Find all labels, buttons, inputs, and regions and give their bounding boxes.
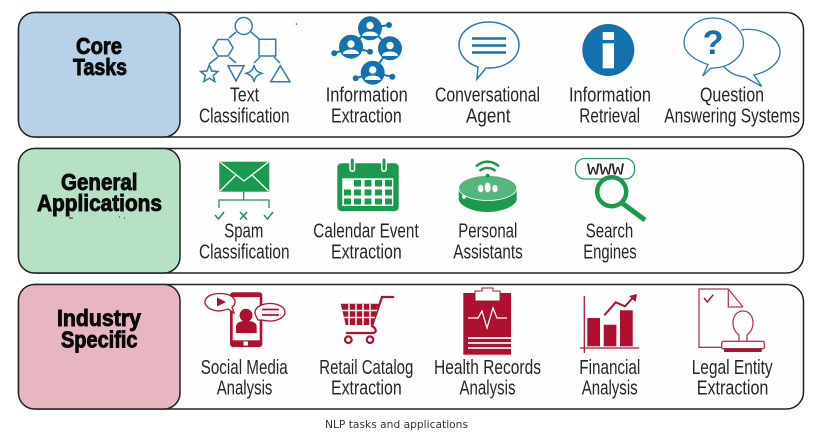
item: financial analysis	[579, 294, 640, 400]
item: personal assistants	[453, 162, 523, 263]
item: retail catalog extraction: Retail Catalog	[319, 357, 413, 379]
category box: general applications	[18, 148, 180, 273]
item: search engines: Search	[586, 221, 633, 243]
icon: shopping cart	[341, 297, 393, 343]
caption: NLP tasks and applications	[325, 418, 468, 431]
item: information retrieval: Retrieval	[579, 105, 640, 127]
category box: core tasks	[18, 12, 180, 137]
panel: core tasks	[18, 12, 804, 137]
item: personal assistants: Personal	[458, 221, 517, 243]
category box: industry specific: Specific	[61, 326, 138, 352]
stray red mark	[296, 23, 297, 25]
item: personal assistants: Assistants	[453, 241, 523, 263]
panel: general applications	[18, 148, 804, 273]
category box: industry specific: Industry	[57, 305, 141, 331]
item: conversational agent: Agent	[466, 105, 511, 127]
item: information extraction	[326, 16, 408, 127]
item: social media analysis: Social Media	[201, 357, 288, 379]
item: health records analysis: Health Records	[434, 357, 541, 379]
item: text classification: Text	[230, 84, 259, 106]
item: spam classification	[199, 162, 290, 263]
icon: bar chart with arrow	[580, 294, 639, 353]
icon: speech bubble	[459, 22, 519, 79]
item: calendar event extraction: Calendar Event	[313, 221, 419, 243]
item: question answering systems: Question	[700, 84, 764, 106]
item: information retrieval	[569, 24, 651, 127]
category box: core tasks: Core	[76, 33, 122, 59]
icon: smart speaker	[459, 162, 517, 212]
category box: core tasks: Tasks	[73, 54, 127, 80]
item: retail catalog extraction: Extraction	[331, 378, 402, 400]
item: search engines: Engines	[583, 241, 637, 263]
panel: industry specific	[18, 284, 804, 409]
item: retail catalog extraction	[319, 297, 413, 400]
item: health records analysis	[434, 288, 541, 400]
item: spam classification: Classification	[199, 241, 290, 263]
category box: industry specific	[18, 284, 180, 409]
icon: medical clipboard	[463, 288, 511, 355]
item: social media analysis	[201, 292, 288, 400]
item: information extraction: Extraction	[331, 105, 402, 127]
item: text classification	[199, 18, 290, 127]
icon: connected people	[331, 16, 402, 85]
item: calendar event extraction	[313, 160, 419, 263]
item: legal entity extraction: Legal Entity	[692, 357, 773, 379]
item: information retrieval: Information	[569, 84, 651, 106]
icon: envelope with checks	[215, 162, 273, 220]
item: conversational agent	[435, 22, 540, 127]
item: financial analysis: Analysis	[582, 378, 638, 400]
item: legal entity extraction: Extraction	[697, 378, 768, 400]
item: calendar event extraction: Extraction	[331, 241, 402, 263]
item: financial analysis: Financial	[579, 357, 640, 379]
item: question answering systems	[664, 18, 800, 127]
icon: two speech bubbles: ?	[703, 24, 723, 62]
item: information extraction: Information	[326, 84, 408, 106]
item: conversational agent: Conversational	[435, 84, 540, 106]
item: search engines	[576, 158, 645, 263]
icon: info circle	[582, 24, 634, 76]
category box: general applications: General	[61, 169, 138, 195]
icon: document and stamp	[699, 289, 764, 352]
icon: calendar	[337, 160, 399, 211]
item: spam classification: Spam	[224, 221, 263, 243]
item: social media analysis: Analysis	[217, 378, 272, 400]
icon: www magnifier: WWW	[587, 162, 625, 180]
item: legal entity extraction	[692, 289, 773, 400]
icon: shape tree	[201, 18, 290, 82]
icon: phone with bubbles	[205, 292, 285, 347]
category box: general applications: Applications	[37, 190, 162, 216]
item: health records analysis: Analysis	[460, 378, 516, 400]
item: text classification: Classification	[199, 105, 290, 127]
